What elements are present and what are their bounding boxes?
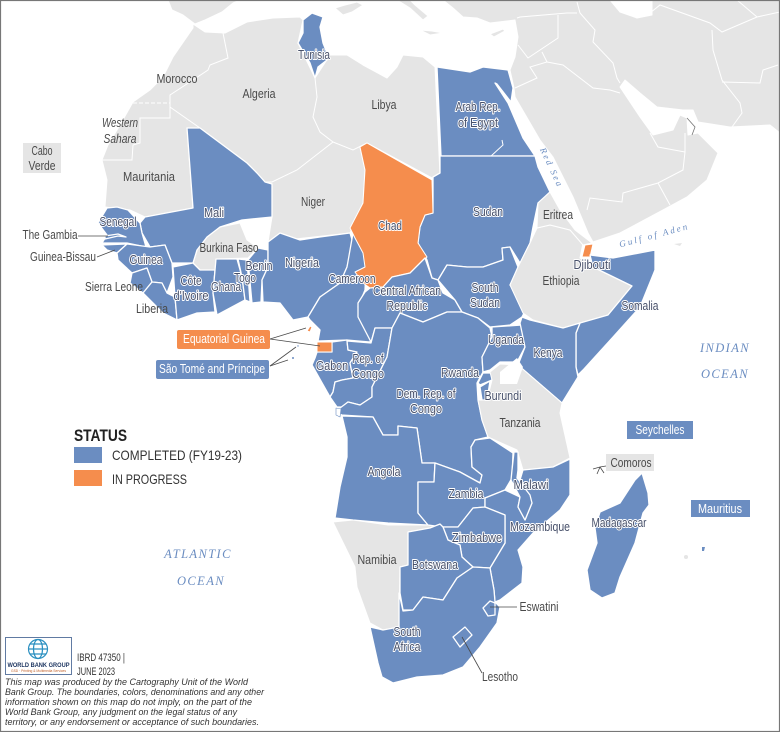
country: Cameroon <box>308 233 372 342</box>
country: Lesotho <box>453 627 472 647</box>
label: Niger: Niger <box>301 195 325 209</box>
label: Mali: Mali <box>204 206 224 220</box>
sea label: Red Sea: Red Sea <box>538 145 565 189</box>
country: Eswatini <box>483 601 495 616</box>
country: Ethiopia <box>510 225 632 328</box>
country: Central African Republic <box>358 258 462 342</box>
label: Djibouti: Djibouti <box>574 258 610 272</box>
Lake Victoria <box>500 358 523 384</box>
label: The Gambia: The Gambia <box>22 228 78 242</box>
disclaimer: Bank Group. The boundaries, colors, denominations and any other <box>5 687 265 697</box>
label box: Cabo Verde <box>23 143 61 173</box>
land: Middle East internal borders <box>515 0 780 210</box>
country: Angola <box>335 416 435 525</box>
label: Mozambique: Mozambique <box>510 520 570 534</box>
country: Guinea <box>117 244 173 293</box>
disclaimer: information shown on this map do not imply, on the part of the <box>5 697 252 707</box>
label: Kenya: Kenya <box>534 346 563 360</box>
land: Europe <box>168 0 505 37</box>
country: Rwanda <box>478 373 492 385</box>
label: Botswana: Botswana <box>412 558 458 572</box>
label: Dem. Rep. of Congo <box>396 387 456 416</box>
label: Chad: Chad <box>378 219 402 233</box>
country: Sudan <box>418 156 550 280</box>
land: Burkina Faso <box>193 223 258 270</box>
country: Dem. Rep. of Congo <box>337 312 492 483</box>
country: Eritrea <box>537 192 592 245</box>
legend text: completed: COMPLETED (FY19-23) <box>112 447 242 463</box>
country: Benin <box>248 248 268 303</box>
legend title: STATUS <box>74 426 127 445</box>
label: Togo: Togo <box>234 271 256 285</box>
label: Guinea: Guinea <box>130 253 163 267</box>
country: Equatorial Guinea <box>307 326 332 352</box>
legend text: in progress: IN PROGRESS <box>112 471 187 487</box>
label box: Sao Tome and Principe <box>156 360 269 379</box>
country: South Africa <box>370 567 500 683</box>
ocean label: Indian Ocean: INDIAN <box>699 341 750 355</box>
island: Mauritius <box>702 547 705 551</box>
disclaimer: territory, or any endorsement or acceptance of such boundaries. <box>5 717 259 727</box>
land: North Africa internal borders <box>102 33 367 182</box>
label: Arab Rep. of Egypt: of Egypt <box>458 116 498 130</box>
country: Botswana <box>400 524 473 610</box>
country: South Sudan <box>438 247 527 327</box>
label: Rep. of Congo: Rep. of <box>352 352 384 366</box>
label: Central African Republic <box>373 284 441 313</box>
label: Tanzania: Tanzania <box>500 416 541 430</box>
label: South Africa: South <box>394 625 421 639</box>
ocean label: Atlantic Ocean: ATLANTIC <box>163 547 232 561</box>
country: Togo <box>238 259 250 302</box>
country: Cabinda <box>336 408 341 417</box>
map reference <box>77 652 125 678</box>
label: Sudan: Sudan <box>473 205 503 219</box>
label: Eswatini: Eswatini <box>520 600 558 614</box>
label box: Cabo Verde: Verde <box>28 159 56 173</box>
land: Middle East <box>443 0 780 242</box>
disclaimer: This map was produced by the Cartography Unit of the World <box>5 677 249 687</box>
label: Eritrea: Eritrea <box>543 208 573 222</box>
label: Rwanda: Rwanda <box>441 366 479 380</box>
land: Northwest Africa <box>102 17 440 242</box>
label box: Equatorial Guinea <box>177 330 270 349</box>
label: Ethiopia: Ethiopia <box>542 274 580 288</box>
label: Zimbabwe: Zimbabwe <box>452 531 502 545</box>
label: Cote d'Ivoire: d'Ivoire <box>174 289 209 303</box>
label: Cote d'Ivoire <box>174 274 209 303</box>
label: Ghana: Ghana <box>211 280 241 294</box>
label: Central African Republic: Republic <box>386 299 428 313</box>
logo: World Bank Group: WORLD BANK GROUP <box>8 662 70 669</box>
country: Chad <box>350 143 433 288</box>
country: Mali <box>140 128 272 263</box>
country: Madagascar <box>587 473 649 598</box>
label box: Seychelles: Seychelles <box>636 423 684 437</box>
label: Uganda: Uganda <box>488 333 524 347</box>
islands: Sao Tome and Principe <box>292 345 299 359</box>
label box: Cabo Verde: Cabo <box>32 144 53 158</box>
country: Guinea-Bissau <box>102 244 127 253</box>
country: Liberia <box>143 282 177 320</box>
label: Libya: Libya <box>372 98 397 112</box>
label: Western Sahara <box>102 116 138 146</box>
logo: World Bank Group: GSD · Printing & Multimedia Services <box>11 669 66 673</box>
label box: Sao Tome and Principe: São Tomé and Príncipe <box>159 362 265 376</box>
label: Dem. Rep. of Congo: Dem. Rep. of <box>396 387 456 401</box>
label: Zambia: Zambia <box>448 487 484 501</box>
label: South Africa <box>394 625 421 654</box>
country: Somalia <box>576 250 655 375</box>
country: Sierra Leone <box>130 268 152 293</box>
country: Kenya <box>518 317 580 403</box>
country: The Gambia <box>105 234 126 239</box>
legend <box>74 426 242 487</box>
label: Nigeria: Nigeria <box>285 256 319 270</box>
label: Rep. of Congo <box>352 352 384 381</box>
Lake Nasser <box>490 140 503 157</box>
country: Namibia <box>333 520 440 630</box>
label: Arab Rep. of Egypt: Arab Rep. <box>456 100 500 114</box>
country: Burundi <box>480 381 490 400</box>
label box: Equatorial Guinea: Equatorial Guinea <box>183 332 265 346</box>
country: Tunisia <box>298 13 327 78</box>
label: Dem. Rep. of Congo: Congo <box>410 402 442 416</box>
country: Cote d'Ivoire <box>173 263 215 320</box>
label box: Seychelles <box>627 421 693 439</box>
country: Egypt <box>437 67 535 156</box>
label: Madagascar: Madagascar <box>592 516 646 530</box>
label: Senegal: Senegal <box>100 215 136 229</box>
legend swatch: in progress <box>74 470 102 486</box>
label: Liberia: Liberia <box>136 302 168 316</box>
label: Cote d'Ivoire: Côte <box>180 274 202 288</box>
label: Arab Rep. of Egypt <box>456 100 500 130</box>
country: Senegal <box>98 207 146 247</box>
label: Central African Republic: Central African <box>373 284 441 298</box>
country: Djibouti <box>582 244 593 257</box>
disclaimer <box>5 677 265 727</box>
label: South Sudan <box>470 281 500 310</box>
ocean label: Indian Ocean <box>699 341 750 381</box>
logo: World Bank Group <box>6 638 72 674</box>
label box: Comoros: Comoros <box>610 456 652 470</box>
country: Uganda <box>482 325 525 372</box>
island: Socotra <box>674 243 682 246</box>
label: Namibia: Namibia <box>358 553 397 567</box>
label: Western Sahara: Western <box>102 116 138 130</box>
country: Malawi <box>511 452 532 520</box>
label: Mauritania: Mauritania <box>123 170 175 184</box>
label: Burundi: Burundi <box>484 389 522 403</box>
label: Sierra Leone: Sierra Leone <box>85 280 143 294</box>
country: Gabon <box>312 340 357 397</box>
label: Rep. of Congo: Congo <box>352 367 384 381</box>
country: Nigeria <box>262 233 353 320</box>
map reference: JUNE 2023 <box>77 666 115 678</box>
ocean label: Indian Ocean: OCEAN <box>701 367 749 381</box>
sea label: Gulf of Aden: Gulf of Aden <box>618 221 690 249</box>
island: Reunion <box>684 555 688 559</box>
label: Gabon: Gabon <box>316 359 348 373</box>
label: Morocco: Morocco <box>156 72 198 86</box>
label: Burkina Faso: Burkina Faso <box>200 241 259 255</box>
label: Algeria: Algeria <box>242 87 276 101</box>
label: Cameroon: Cameroon <box>328 272 376 286</box>
icon: globe <box>28 640 48 658</box>
label: Benin: Benin <box>246 259 273 273</box>
legend swatch: completed <box>74 447 102 463</box>
label box: Comoros <box>606 454 654 471</box>
label: South Africa: Africa <box>394 640 421 654</box>
disclaimer: World Bank Group, any judgment on the legal status of any <box>5 707 237 717</box>
country: Ghana <box>213 259 245 315</box>
label: Angola: Angola <box>368 465 401 479</box>
ocean label: Atlantic Ocean: OCEAN <box>177 574 225 588</box>
ocean label: Atlantic Ocean <box>163 547 232 588</box>
label: Lesotho: Lesotho <box>482 670 518 684</box>
country: Tanzania <box>478 364 570 470</box>
label: South Sudan: Sudan <box>470 296 500 310</box>
label: South Sudan: South <box>472 281 499 295</box>
label: Guinea-Bissau: Guinea-Bissau <box>30 250 96 264</box>
country: Mozambique <box>485 459 570 602</box>
label box: Mauritius: Mauritius <box>698 502 742 516</box>
strait of Hormuz arc <box>687 118 695 135</box>
label: Malawi: Malawi <box>514 478 548 492</box>
country: Republic of Congo <box>330 328 392 407</box>
country: Zambia <box>418 438 513 527</box>
map reference: IBRD 47350 | <box>77 652 125 664</box>
label: Tunisia: Tunisia <box>298 48 330 62</box>
leader lines <box>78 236 606 673</box>
country: Zimbabwe <box>443 507 505 568</box>
label: Western Sahara: Sahara <box>104 132 137 146</box>
label: Somalia: Somalia <box>622 299 659 313</box>
